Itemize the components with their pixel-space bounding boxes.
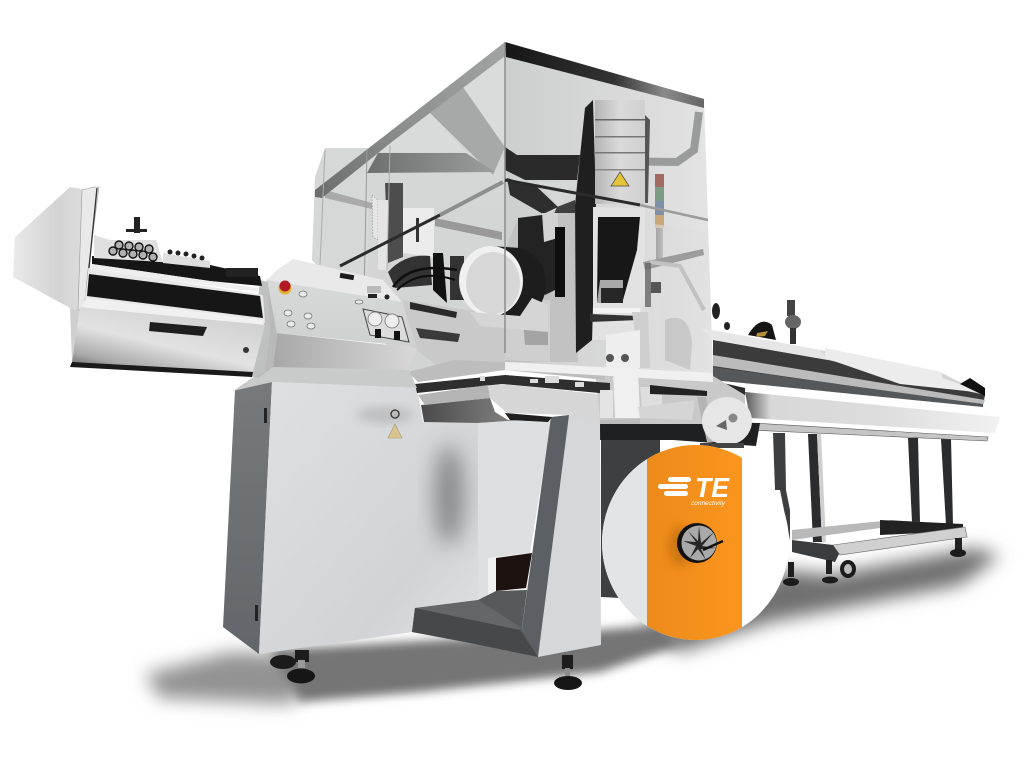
connectivity caption: connectivity [691,500,726,507]
right pedestal panels [478,415,601,657]
rear conveyor legs [773,433,953,542]
console neck [233,365,417,391]
cabinet front door [259,382,478,654]
drum [459,246,548,332]
feeder side panel [70,280,270,378]
enclosure frame [315,42,708,353]
cabinet feet [270,650,582,690]
lower conveyor tray [710,380,1000,441]
cabinet side [223,382,272,654]
signal tower [655,174,664,260]
warning triangle [611,172,629,186]
disk grey section [602,459,647,626]
glass enclosure back [312,42,713,377]
floor shadow [145,548,1000,704]
right end of enclosure [632,222,713,373]
console push buttons [284,291,363,329]
control console [252,259,417,378]
lower bracket assembly [600,330,707,424]
reel disk [600,440,789,645]
feed column [575,100,650,353]
disk orange band [647,440,742,645]
reel knob [669,523,723,566]
feeder rail and rollers [90,217,262,292]
central deck [408,360,745,424]
TE logo stripes [658,477,691,496]
conveyor top rail [700,328,985,407]
left mechanism behind glass [372,183,505,368]
conveyor base frame [792,520,967,562]
feeder drawer [70,268,265,377]
feeder cover [13,187,99,310]
conveyor top fixtures [712,300,801,344]
pulley [697,397,752,448]
dark base and strut [412,415,569,657]
central mechanism [505,213,578,362]
TE logo wordmark: TE [695,472,730,503]
emergency stop button [278,280,292,294]
gauge panel [363,309,409,342]
dark housing behind disk [600,423,760,600]
pedestal shelf [418,384,600,423]
casters and feet [783,538,966,586]
